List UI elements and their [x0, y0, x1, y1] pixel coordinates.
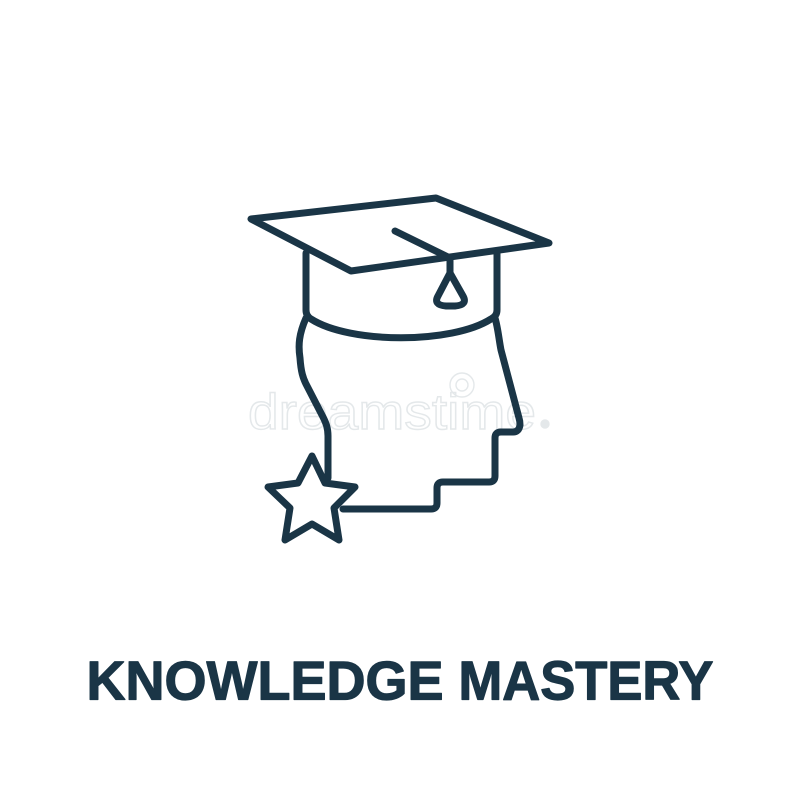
- title: MASTERY: [458, 650, 714, 712]
- title: KNOWLEDGE: [86, 650, 444, 712]
- mortarboard: [251, 198, 549, 271]
- watermark: dreamstime: [248, 384, 536, 440]
- title: [86, 650, 714, 712]
- head outline: [299, 318, 520, 509]
- icon: star: [268, 456, 355, 540]
- tassel: [395, 231, 464, 306]
- icon: graduate head: [251, 198, 549, 540]
- cap band: [306, 253, 497, 338]
